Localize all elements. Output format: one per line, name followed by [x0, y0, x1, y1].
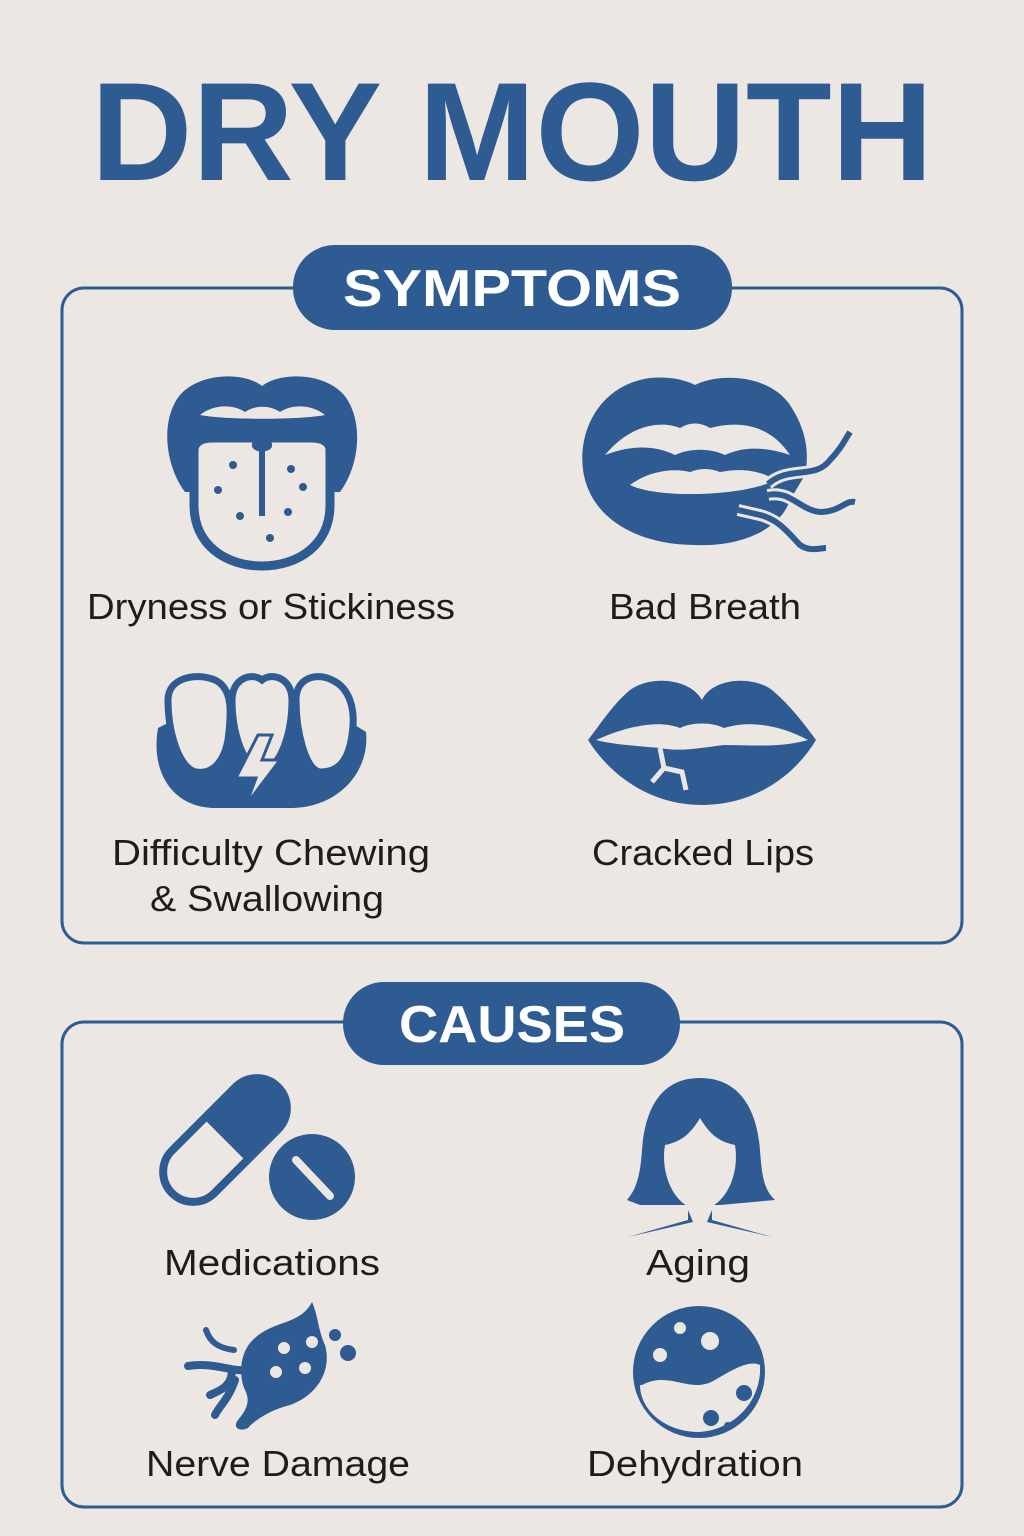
label: difficulty chewing [112, 832, 430, 919]
icon: pills [151, 1066, 355, 1220]
label: bad breath: Bad Breath [609, 586, 801, 627]
label: cracked lips: Cracked Lips [592, 832, 814, 873]
icon: cracked lips [588, 681, 816, 805]
icon: nerve damage [188, 1302, 356, 1430]
title: DRY MOUTH [91, 53, 933, 210]
icon: aging woman [627, 1078, 775, 1237]
label: difficulty chewing: Difficulty Chewing [112, 832, 430, 873]
heading: causes [343, 982, 680, 1065]
label: dehydration: Dehydration [587, 1443, 803, 1484]
heading: symptoms [293, 245, 732, 330]
label: medications: Medications [164, 1242, 380, 1283]
label: dryness: Dryness or Stickiness [87, 586, 455, 627]
icon: dehydration [633, 1306, 765, 1438]
panel: causes [62, 982, 962, 1507]
label: nerve damage: Nerve Damage [146, 1443, 410, 1484]
label: aging: Aging [646, 1242, 750, 1283]
panel: symptoms [62, 245, 962, 943]
icon: teeth [157, 677, 366, 808]
icon: bad breath [582, 377, 855, 549]
label: difficulty chewing: & Swallowing [150, 878, 384, 919]
heading: causes: CAUSES [399, 996, 625, 1054]
heading: symptoms: SYMPTOMS [343, 260, 681, 318]
icon: tongue [167, 376, 357, 566]
